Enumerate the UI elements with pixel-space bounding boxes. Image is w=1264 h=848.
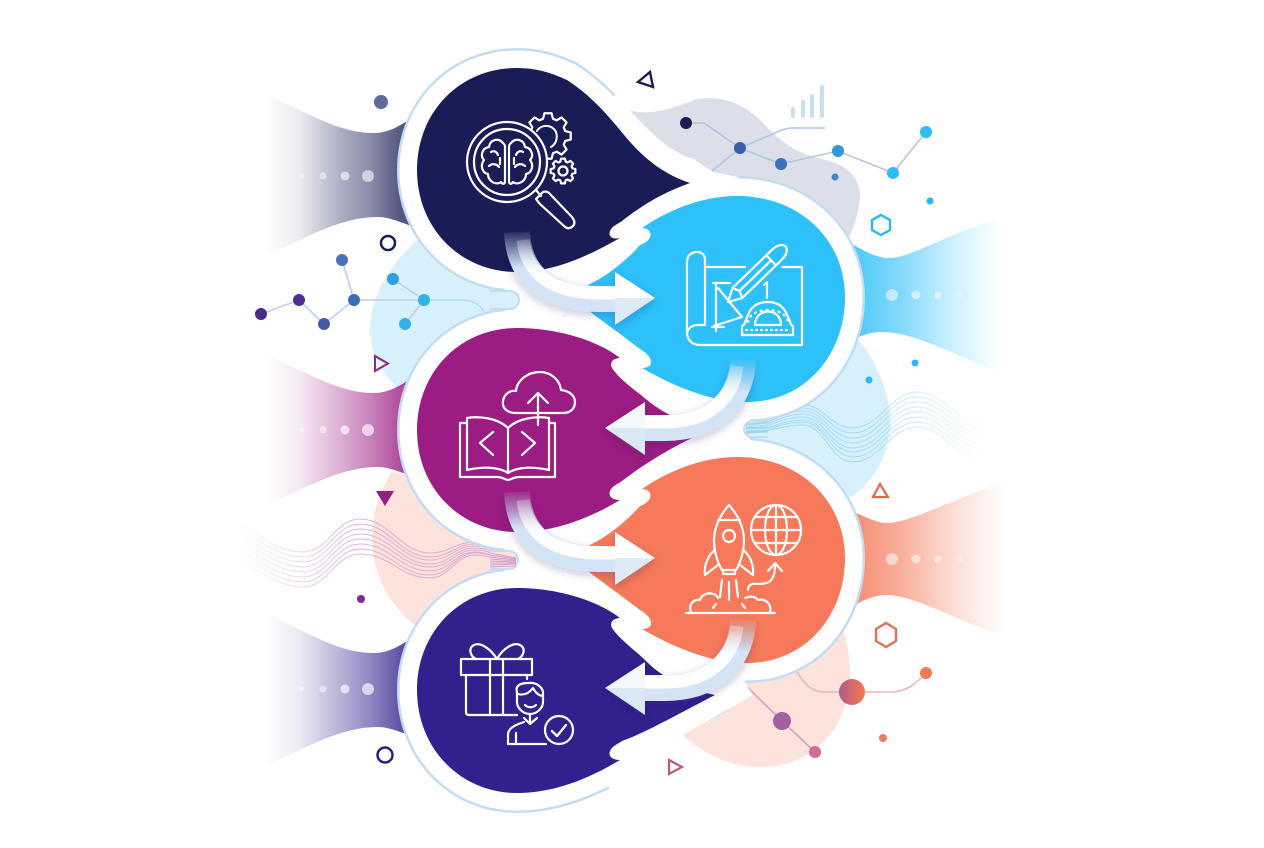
dots: purple ribbon (300, 424, 374, 436)
hexagon: orange (876, 623, 896, 647)
wave lines: left (233, 519, 517, 587)
stage 2: design drop (565, 196, 845, 402)
triangle: purple filled (376, 491, 394, 506)
ribbon: orange (845, 482, 1005, 636)
drop: indigo (417, 588, 715, 793)
triangle: purple outline (375, 356, 388, 371)
scattered shapes (357, 72, 918, 774)
drop: purple (417, 328, 710, 532)
icon: blueprint pencil and protractor (687, 241, 802, 345)
dots: indigo ribbon (300, 683, 374, 695)
mini bar chart (791, 85, 824, 118)
network: bottom right (743, 667, 932, 758)
triangle: navy outline (638, 72, 653, 87)
tab: peach gap end lower left (490, 551, 518, 569)
ring: indigo (378, 748, 392, 762)
ribbon: blue (845, 218, 1000, 372)
wave lines: right (745, 392, 990, 462)
triangle: rose outline (669, 760, 682, 774)
arrow: research to design (517, 232, 655, 325)
dots: blue ribbon (886, 289, 962, 301)
blob: peach bottom right (678, 610, 850, 767)
drop: sky blue (565, 196, 845, 402)
ring: navy (381, 236, 395, 250)
network: top right (680, 117, 934, 204)
background blobs (370, 98, 890, 767)
tab: light blue gap end upper left (490, 291, 519, 309)
blob: grey top right (615, 98, 860, 236)
icon: open book code and cloud upload (460, 372, 575, 480)
dots: navy ribbon (300, 170, 374, 182)
drop: orange (565, 457, 845, 663)
blob: light blue left (370, 238, 520, 388)
ribbon: navy (255, 92, 430, 260)
stage 1: research drop (417, 68, 690, 272)
ribbon: purple (255, 352, 430, 510)
icon: gift and happy customer (461, 644, 573, 744)
network: left (255, 254, 485, 330)
icon: brain magnifier and gears (467, 113, 575, 228)
stage 3: build drop (417, 328, 710, 532)
side ribbons (255, 92, 1005, 770)
dot: purple (357, 595, 365, 603)
white halos (417, 68, 845, 802)
halo outlines (417, 68, 845, 793)
tab: light blue gap end right (744, 421, 768, 437)
drop: navy (417, 68, 690, 272)
icon: rocket and globe (686, 505, 801, 613)
blob: peach left (372, 472, 525, 630)
dot: slate (374, 95, 388, 109)
hexagon: blue (872, 215, 890, 235)
stage 5: customer drop (417, 588, 715, 793)
stage 4: launch drop (565, 457, 845, 663)
arrow: design to build (605, 360, 743, 455)
ribbon: indigo (255, 610, 430, 770)
dots: blue (866, 360, 918, 384)
ribbon dots (300, 170, 962, 695)
arrow: launch to customer (605, 620, 743, 715)
triangle: orange outline (873, 484, 888, 497)
dots: orange ribbon (886, 553, 962, 565)
blob: light blue right (730, 336, 890, 498)
arrow: build to launch (517, 492, 655, 585)
